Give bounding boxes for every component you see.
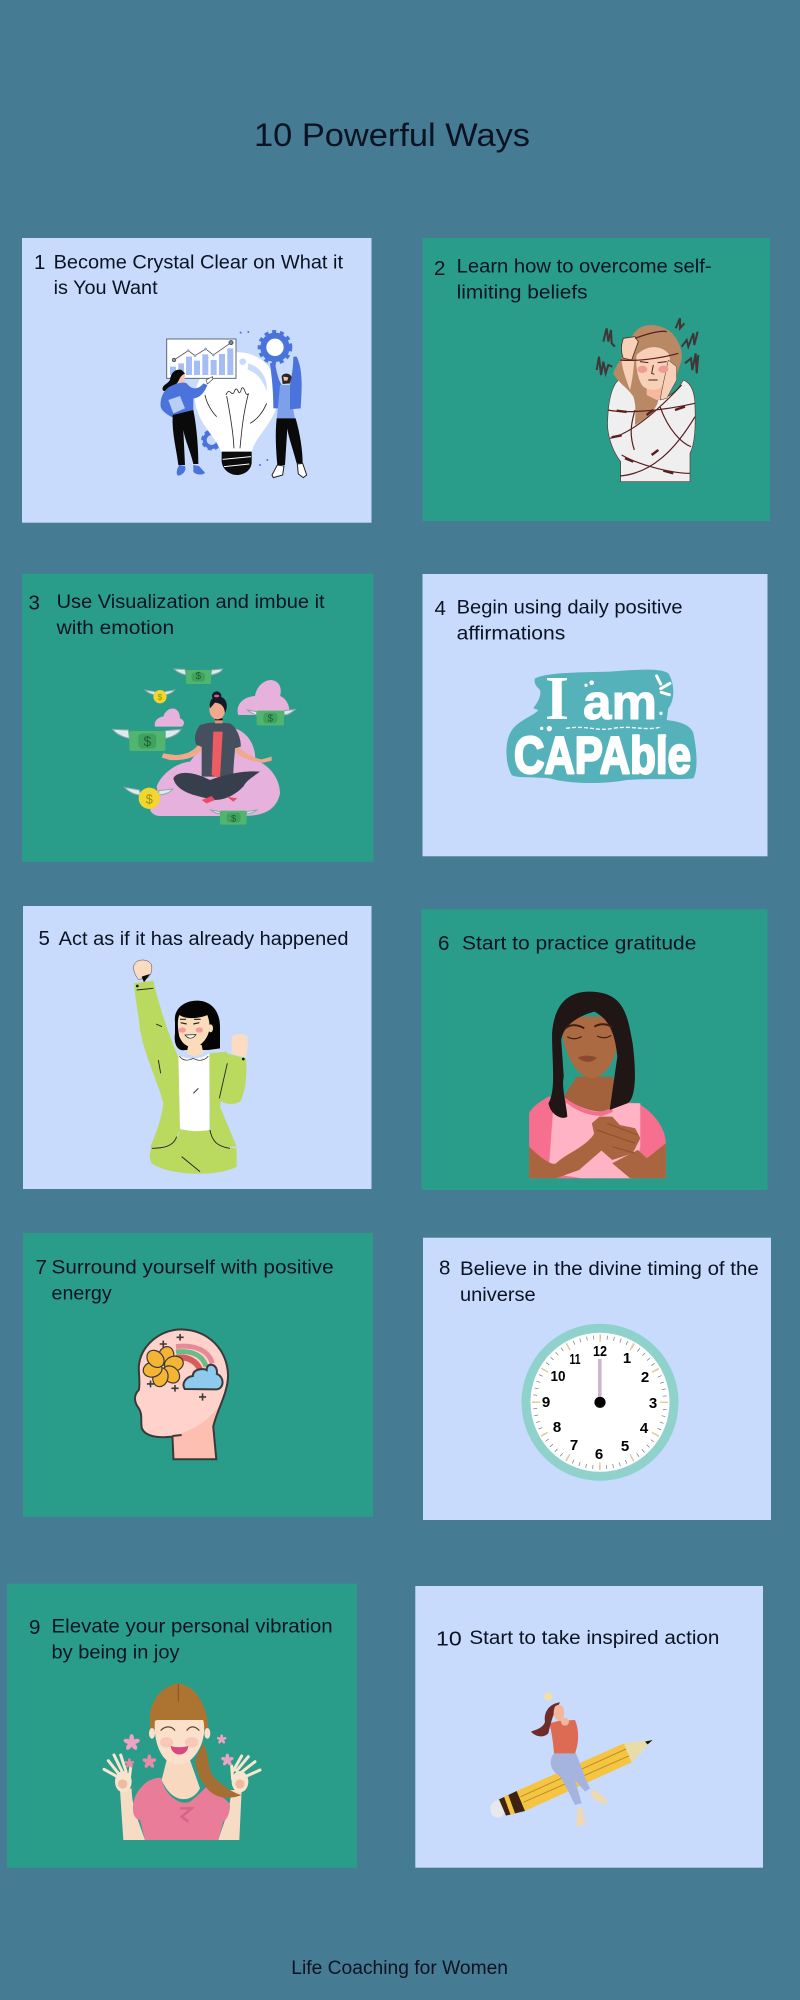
heading: step 7: energy	[52, 1283, 112, 1304]
heading: step 6: Start to practice gratitude	[462, 933, 696, 954]
icon: clock at twelve: 6	[595, 1446, 603, 1463]
icon: clock at twelve: 12	[593, 1343, 607, 1360]
heading: step 8: 8	[439, 1256, 450, 1279]
icon: clock at twelve: 2	[641, 1369, 649, 1386]
heading: step 1: 1	[34, 251, 45, 274]
icon: meditating woman with flying money: $	[268, 713, 274, 724]
heading: step 2: limiting beliefs	[457, 282, 588, 303]
panel: step 8	[423, 1238, 771, 1520]
icon: woman with hands on heart	[529, 992, 666, 1178]
panel: step 2	[422, 238, 770, 521]
icon: I am capable sticker: CAPAble	[514, 727, 691, 785]
heading: step 10: Start to take inspired action	[469, 1628, 719, 1649]
heading: step 6: 6	[438, 932, 449, 955]
heading: step 1	[34, 251, 344, 299]
heading: step 7: Surround yourself with positive	[52, 1257, 334, 1278]
panel: step 4	[422, 574, 768, 856]
heading: step 2: Learn how to overcome self-	[457, 256, 712, 277]
panel: step 7	[23, 1233, 373, 1517]
icon: clock at twelve: 4	[640, 1420, 649, 1437]
heading: step 2	[434, 256, 712, 303]
icon: joyful woman with flowers	[104, 1683, 260, 1840]
heading: step 4: 4	[434, 597, 446, 620]
icon: meditating woman with flying money: $	[196, 671, 202, 682]
footer: Life Coaching for Women	[291, 1958, 508, 1979]
heading: step 9: by being in joy	[52, 1642, 180, 1663]
heading: step 8	[439, 1256, 759, 1306]
icon: clock at twelve: 8	[553, 1419, 561, 1436]
heading: step 7	[36, 1256, 334, 1304]
heading: step 5: 5	[38, 927, 50, 950]
icon: clock at twelve: 11	[570, 1351, 580, 1368]
heading: step 7: 7	[36, 1256, 47, 1279]
panel: step 9	[7, 1584, 357, 1868]
heading: step 8: universe	[460, 1285, 536, 1306]
icon: clock at twelve: 7	[570, 1437, 578, 1454]
title: 10 Powerful Ways	[254, 117, 530, 153]
icon: woman tied in barbed wire	[597, 318, 698, 482]
icon: woman sitting on a pencil	[490, 1693, 653, 1827]
icon: meditating woman with flying money: $	[143, 733, 151, 749]
heading: step 5: Act as if it has already happened	[59, 929, 348, 950]
icon: meditating woman with flying money: $	[231, 813, 237, 823]
heading: step 4	[434, 597, 683, 644]
heading: step 1: Become Crystal Clear on What it	[54, 252, 344, 273]
heading: step 2: 2	[434, 257, 445, 280]
icon: meditating woman with flying money: $	[158, 693, 163, 702]
icon: clock at twelve: 5	[621, 1438, 629, 1455]
heading: step 3: Use Visualization and imbue it	[57, 592, 325, 613]
icon: team with light bulb	[161, 331, 307, 478]
icon: clock at twelve: 9	[542, 1394, 550, 1411]
heading: step 1: is You Want	[54, 278, 158, 299]
icon: I am capable sticker	[506, 665, 697, 785]
icon: head with flower and rainbow	[135, 1329, 228, 1459]
heading: step 4: affirmations	[457, 623, 565, 644]
heading: step 8: Believe in the divine timing of the	[460, 1259, 759, 1280]
icon: I am capable sticker: I	[545, 665, 569, 733]
icon: meditating woman with flying money	[113, 669, 295, 825]
heading: step 3: 3	[28, 591, 40, 614]
heading: step 10: 10	[436, 1628, 462, 1651]
icon: I am capable sticker: am	[583, 676, 657, 730]
panel: step 5	[23, 906, 372, 1189]
icon: clock at twelve	[522, 1324, 678, 1481]
heading: step 9: Elevate your personal vibration	[52, 1616, 333, 1637]
icon: clock at twelve: 10	[550, 1368, 566, 1385]
heading: step 3	[28, 591, 325, 639]
panel: step 3	[22, 574, 374, 862]
heading: step 3: with emotion	[55, 618, 174, 639]
icon: meditating woman with flying money: $	[146, 792, 153, 806]
heading: step 9: 9	[29, 1616, 40, 1639]
heading: step 9	[29, 1616, 333, 1663]
icon: clock at twelve: 3	[649, 1395, 657, 1412]
icon: clock at twelve: 1	[623, 1350, 631, 1367]
panel: step 6	[422, 909, 768, 1190]
icon: woman raising fist in green suit	[134, 960, 248, 1174]
panel: step 10	[415, 1586, 763, 1868]
heading: step 4: Begin using daily positive	[457, 597, 683, 618]
panel: step 1	[22, 238, 372, 523]
